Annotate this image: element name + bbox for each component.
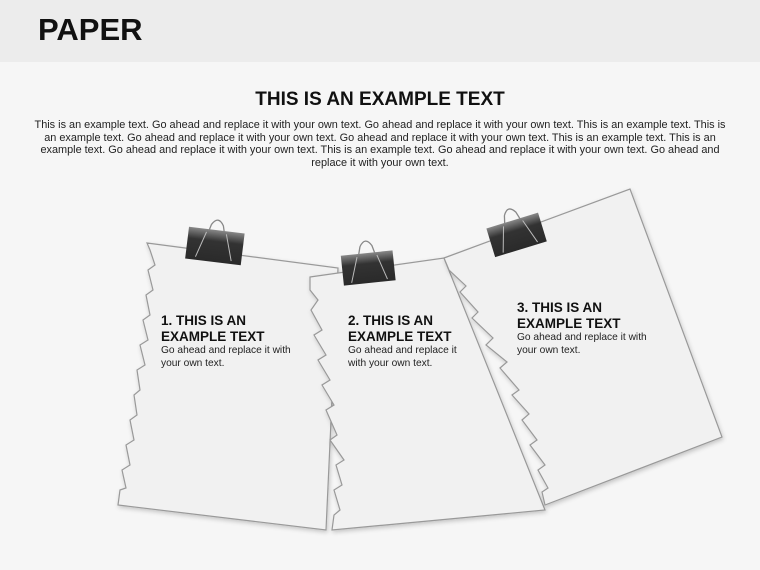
card text 1: EXAMPLE TEXT	[161, 329, 265, 344]
title: THIS IS AN EXAMPLE TEXT	[255, 89, 505, 110]
card text 1: 1. THIS IS AN	[161, 313, 246, 328]
card text 3: your own text.	[517, 344, 580, 356]
intro text: This is an example text. Go ahead and replace it with your own text. Go ahead and replace it with your own text. This is an example text. This is	[35, 119, 725, 131]
intro text: an example text. Go ahead and replace it with your own text. Go ahead and replace it with your own text. This is an example text. This is an	[44, 132, 716, 144]
paper 1	[118, 243, 338, 530]
card text 3	[517, 300, 647, 356]
clip 1	[185, 217, 246, 265]
intro text: replace it with your own text.	[311, 157, 449, 169]
card text 2	[348, 313, 457, 368]
card text 1: Go ahead and replace it with	[161, 345, 291, 356]
card text 2: 2. THIS IS AN	[348, 313, 433, 328]
paper 2	[310, 258, 545, 530]
header title: PAPER	[38, 12, 143, 47]
card text 3: EXAMPLE TEXT	[517, 316, 621, 331]
card text 2: Go ahead and replace it	[348, 345, 457, 356]
intro text: example text. Go ahead and replace it with your own text. This is an example text. Go ahead and replace it with your own text. Go ahead and	[40, 144, 720, 156]
intro text	[34, 119, 726, 169]
card text 3: Go ahead and replace it with	[517, 332, 647, 343]
card text 1: your own text.	[161, 358, 224, 368]
card text 2: with your own text.	[348, 358, 432, 368]
header band	[0, 0, 760, 62]
card text 2: EXAMPLE TEXT	[348, 329, 452, 344]
card text 1	[161, 313, 291, 368]
card text 3: 3. THIS IS AN	[517, 300, 602, 315]
paper 3	[444, 189, 722, 505]
clip 3	[483, 201, 547, 257]
clip 2	[340, 238, 396, 286]
